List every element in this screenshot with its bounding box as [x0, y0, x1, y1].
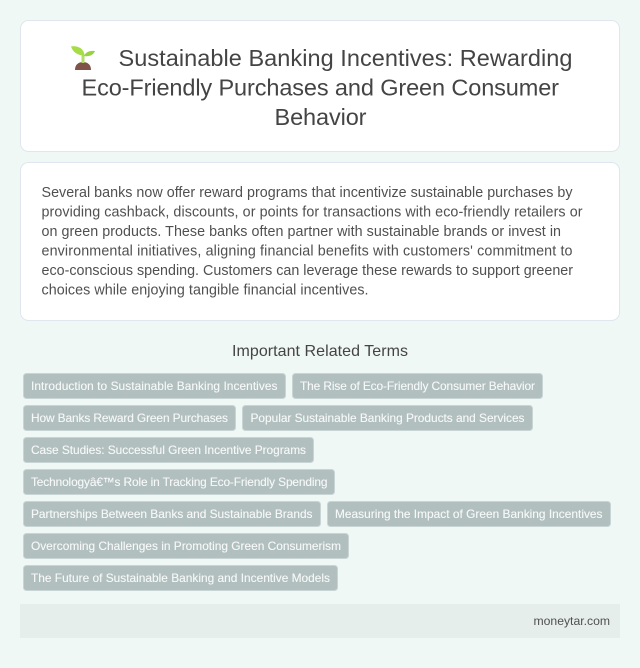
icon: seedling — [71, 46, 95, 70]
tag: measuring: Measuring the Impact of Green Banking Incentives — [335, 507, 603, 521]
tag: popular products: Popular Sustainable Banking Products and Services — [250, 411, 525, 425]
tag: future: The Future of Sustainable Banking and Incentive Models — [31, 571, 330, 585]
tag: how banks reward — [24, 406, 236, 430]
tag: technology: Technologyâ€™s Role in Tracking Eco-Friendly Spending — [31, 475, 328, 489]
tag: future — [24, 566, 338, 590]
description text: choices while enjoying tangible financial incentives. — [42, 282, 368, 298]
panel: title card — [20, 20, 620, 152]
tag: introduction: Introduction to Sustainable Banking Incentives — [31, 379, 278, 393]
description text: on green products. These banks often partner with sustainable brands or invest in — [42, 224, 561, 240]
title: Sustainable Banking Incentives: Rewarding — [118, 45, 572, 71]
tag list — [24, 374, 610, 590]
tag: popular products — [242, 406, 532, 430]
title: Behavior — [274, 104, 367, 130]
tag: measuring — [328, 502, 610, 526]
description text: Several banks now offer reward programs that incentivize sustainable purchases by — [42, 185, 573, 201]
tag: case studies — [24, 438, 314, 462]
tag: partnerships — [24, 502, 320, 526]
tag: technology — [24, 470, 334, 494]
tag: rise: The Rise of Eco-Friendly Consumer Behavior — [300, 379, 535, 393]
description text: environmental initiatives, aligning financial benefits with customers' commitment to — [42, 244, 573, 260]
tag: overcoming: Overcoming Challenges in Promoting Green Consumerism — [31, 539, 341, 553]
description text: providing cashback, discounts, or points for transactions with eco-friendly retailers or — [42, 204, 583, 220]
panel: description — [20, 162, 620, 320]
footer: moneytar.com — [534, 614, 610, 628]
title — [82, 45, 572, 130]
description text — [42, 185, 583, 298]
tag: partnerships: Partnerships Between Banks and Sustainable Brands — [31, 507, 313, 521]
heading: important related terms: Important Related Terms — [232, 343, 408, 360]
tag: rise — [292, 374, 542, 398]
tag: introduction — [24, 374, 286, 398]
tag: how banks reward: How Banks Reward Green Purchases — [31, 411, 228, 425]
footer — [20, 604, 620, 638]
description text: eco-conscious spending. Customers can leverage these rewards to support greener — [42, 263, 573, 279]
title: Eco-Friendly Purchases and Green Consumer — [82, 74, 559, 100]
tag: case studies: Case Studies: Successful Green Incentive Programs — [31, 443, 306, 457]
tag: overcoming — [24, 534, 348, 558]
